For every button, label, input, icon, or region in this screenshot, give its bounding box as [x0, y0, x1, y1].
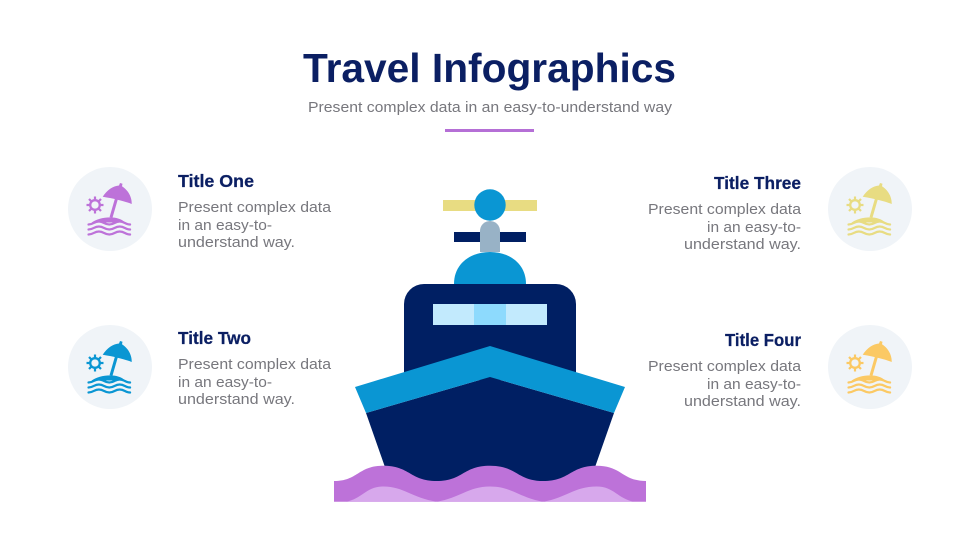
heading: Title Two: [178, 328, 251, 348]
body text: [178, 357, 332, 408]
cabin window: [433, 304, 547, 325]
subtitle: Present complex data in an easy-to-understand way: [308, 99, 673, 116]
hull: [366, 377, 614, 490]
heading: Title Four: [725, 330, 801, 350]
body text: in an easy-to-: [707, 220, 801, 236]
mast stem: [480, 221, 500, 252]
heading: Title Three: [714, 173, 801, 193]
deck band: [355, 346, 625, 413]
body text: understand way.: [684, 237, 801, 253]
item: Title One: [68, 167, 332, 251]
body text: understand way.: [178, 235, 295, 251]
body text: in an easy-to-: [178, 218, 272, 234]
body text: understand way.: [178, 392, 295, 408]
ship illustration: [334, 189, 646, 502]
body text: [178, 200, 332, 251]
body text: Present complex data: [178, 357, 332, 373]
window centre pane: [474, 304, 506, 325]
title: Travel Infographics: [303, 45, 676, 91]
dark wave: [334, 466, 646, 502]
body text: Present complex data: [648, 202, 802, 218]
body text: [648, 202, 802, 253]
icon: beach yellow: [828, 167, 912, 251]
body text: in an easy-to-: [178, 375, 272, 391]
item: Title Four: [648, 325, 912, 410]
cabin: [404, 284, 576, 380]
item: Title Two: [68, 325, 332, 409]
icon: beach orange: [828, 325, 912, 409]
dome: [454, 252, 526, 284]
icon: beach blue: [68, 325, 152, 409]
mast yellow bar: [443, 200, 537, 211]
heading: Title One: [178, 171, 254, 191]
body text: understand way.: [684, 394, 801, 410]
light wave: [346, 486, 634, 502]
mast navy bar: [454, 232, 526, 242]
body text: in an easy-to-: [707, 377, 801, 393]
item: Title Three: [648, 167, 912, 253]
body text: Present complex data: [648, 359, 802, 375]
body text: [648, 359, 802, 410]
title underline: [445, 129, 534, 132]
icon: beach purple: [68, 167, 152, 251]
body text: Present complex data: [178, 200, 332, 216]
mast ball: [474, 189, 506, 221]
